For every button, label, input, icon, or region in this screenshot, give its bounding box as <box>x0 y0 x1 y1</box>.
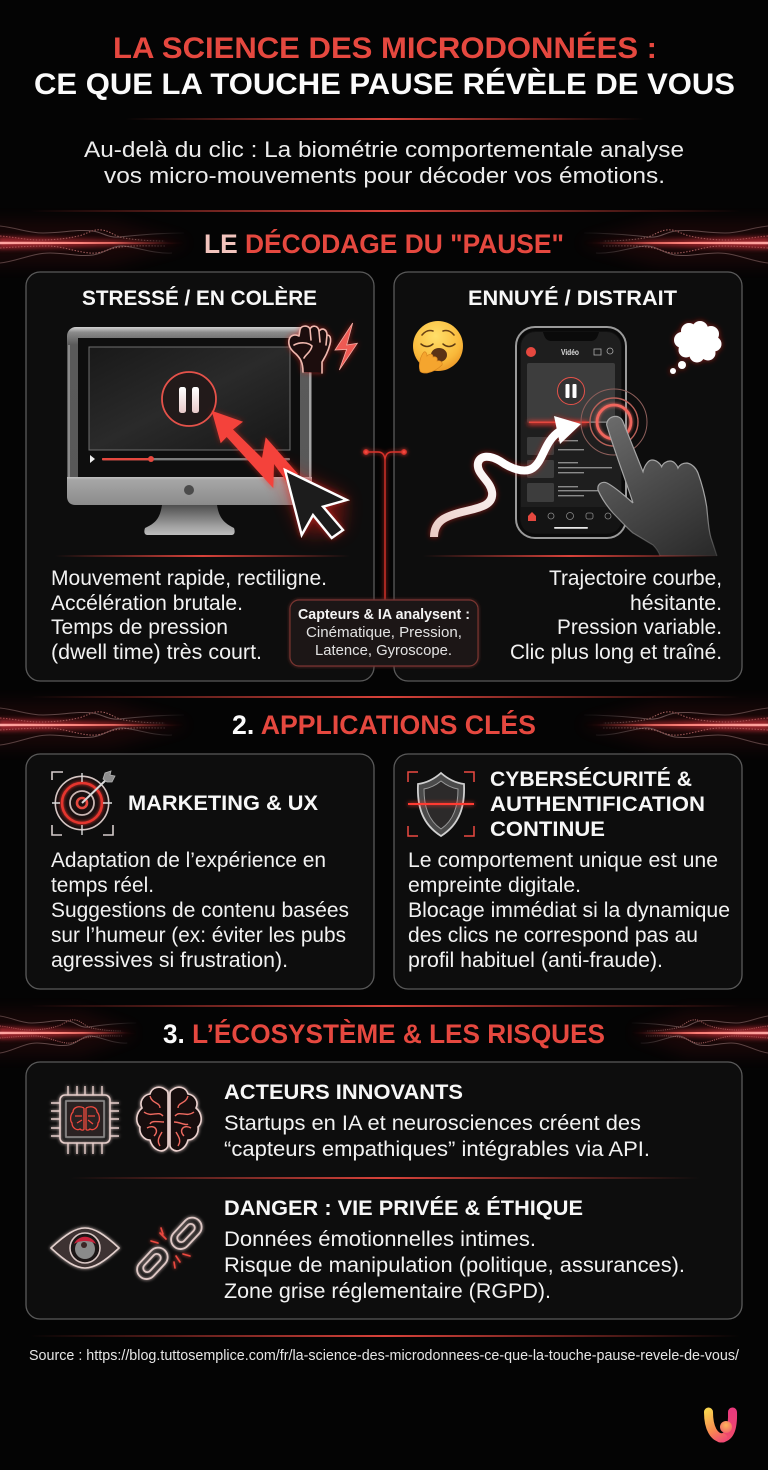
text: ennuyé <box>510 566 722 664</box>
title: CE QUE LA TOUCHE PAUSE RÉVÈLE DE VOUS <box>34 67 735 101</box>
title <box>34 31 735 101</box>
icon: squiggle arrow <box>434 416 581 537</box>
text: cybersécurité <box>408 848 730 972</box>
callout: capteurs: Latence, Gyroscope. <box>315 642 452 659</box>
callout: capteurs: Cinématique, Pression, <box>306 624 462 641</box>
text: stressé: Accélération brutale. <box>51 591 243 615</box>
text: marketing: sur l’humeur (ex: éviter les pubs <box>51 923 346 947</box>
text: marketing: Adaptation de l’expérience en <box>51 848 326 872</box>
icon: fist <box>289 326 331 373</box>
heading: stressé: STRESSÉ / EN COLÈRE <box>82 287 317 310</box>
subtitle: vos micro-mouvements pour décoder vos émotions. <box>104 163 665 188</box>
icon: chip <box>51 1086 119 1154</box>
icon: thought cloud <box>670 321 722 374</box>
panel: stressé <box>26 272 374 681</box>
heading: danger: DANGER : VIE PRIVÉE & ÉTHIQUE <box>224 1197 583 1220</box>
text: danger: Données émotionnelles intimes. <box>224 1227 536 1251</box>
icon: phone <box>516 327 626 538</box>
heading: cybersécurité <box>490 768 705 841</box>
text: stressé: Mouvement rapide, rectiligne. <box>51 566 327 590</box>
icon: brain <box>137 1087 201 1151</box>
text: marketing <box>51 848 349 972</box>
text: ennuyé: Pression variable. <box>557 615 722 639</box>
icon: cursor <box>285 470 347 538</box>
logo <box>708 1412 733 1438</box>
icon: yawning emoji <box>413 321 463 373</box>
text: ennuyé: Trajectoire courbe, <box>549 566 722 590</box>
text: acteurs: “capteurs empathiques” intégrables via API. <box>224 1137 650 1161</box>
arrow: fast move <box>212 411 298 488</box>
icon: broken chain <box>133 1214 206 1283</box>
icon: shield <box>408 772 474 836</box>
source: Source : https://blog.tuttosemplice.com/fr/la-science-des-microdonnees-ce-que-la-touche-pause-revele-de-vous/ <box>29 1347 740 1364</box>
subtitle <box>84 137 684 188</box>
text: cybersécurité: Le comportement unique est une <box>408 848 718 872</box>
callout: capteurs <box>290 600 478 666</box>
heading: cybersécurité: CONTINUE <box>490 818 605 841</box>
text: acteurs: Startups en IA et neurosciences créent des <box>224 1111 641 1135</box>
section banner: écosystème: 3. L’ÉCOSYSTÈME & LES RISQUES <box>163 1018 605 1049</box>
text: cybersécurité: Blocage immédiat si la dynamique <box>408 898 730 922</box>
heading: cybersécurité: CYBERSÉCURITÉ & <box>490 768 692 791</box>
section banner: applications <box>0 703 768 747</box>
connector line <box>364 450 406 602</box>
section banner: le décodage: LE DÉCODAGE DU "PAUSE" <box>204 228 564 259</box>
section banner: écosystème <box>0 1011 768 1055</box>
text: cybersécurité: profil habituel (anti-fraude). <box>408 948 663 972</box>
icon: touch rings <box>581 389 647 455</box>
text: stressé <box>51 566 327 664</box>
callout: capteurs: Capteurs & IA analysent : <box>298 606 470 623</box>
text: ennuyé: hésitante. <box>630 591 722 615</box>
subtitle: Au-delà du clic : La biométrie comportementale analyse <box>84 137 684 162</box>
icon: target <box>52 771 115 835</box>
text: marketing: Suggestions de contenu basées <box>51 898 349 922</box>
icon: lightning <box>335 323 357 370</box>
heading: acteurs: ACTEURS INNOVANTS <box>224 1081 463 1104</box>
section banner: applications: 2. APPLICATIONS CLÉS <box>232 709 536 740</box>
icon: phone: Vidéo <box>561 348 579 357</box>
text: marketing: agressives si frustration). <box>51 948 288 972</box>
text: marketing: temps réel. <box>51 873 154 897</box>
text: ennuyé: Clic plus long et traîné. <box>510 640 722 664</box>
panel: écosystème <box>26 1062 742 1319</box>
glow: cursor <box>275 465 345 535</box>
icon: eye <box>51 1228 119 1268</box>
text: danger: Zone grise réglementaire (RGPD). <box>224 1279 551 1303</box>
text: cybersécurité: des clics ne correspond pas au <box>408 923 698 947</box>
panel: ennuyé <box>394 272 742 681</box>
text: danger <box>224 1227 685 1303</box>
icon: pointing hand <box>598 416 717 556</box>
section banner: le décodage <box>0 221 768 265</box>
panel: cybersécurité <box>394 754 742 989</box>
text: danger: Risque de manipulation (politique, assurances). <box>224 1253 685 1277</box>
text: cybersécurité: empreinte digitale. <box>408 873 581 897</box>
heading: ennuyé: ENNUYÉ / DISTRAIT <box>468 287 677 310</box>
text: stressé: Temps de pression <box>51 615 228 639</box>
text: stressé: (dwell time) très court. <box>51 640 262 664</box>
text: acteurs <box>224 1111 650 1161</box>
title: LA SCIENCE DES MICRODONNÉES : <box>113 31 657 65</box>
heading: cybersécurité: AUTHENTIFICATION <box>490 793 705 816</box>
heading: marketing: MARKETING & UX <box>128 792 318 815</box>
panel: marketing <box>26 754 374 989</box>
icon: monitor <box>67 327 312 535</box>
